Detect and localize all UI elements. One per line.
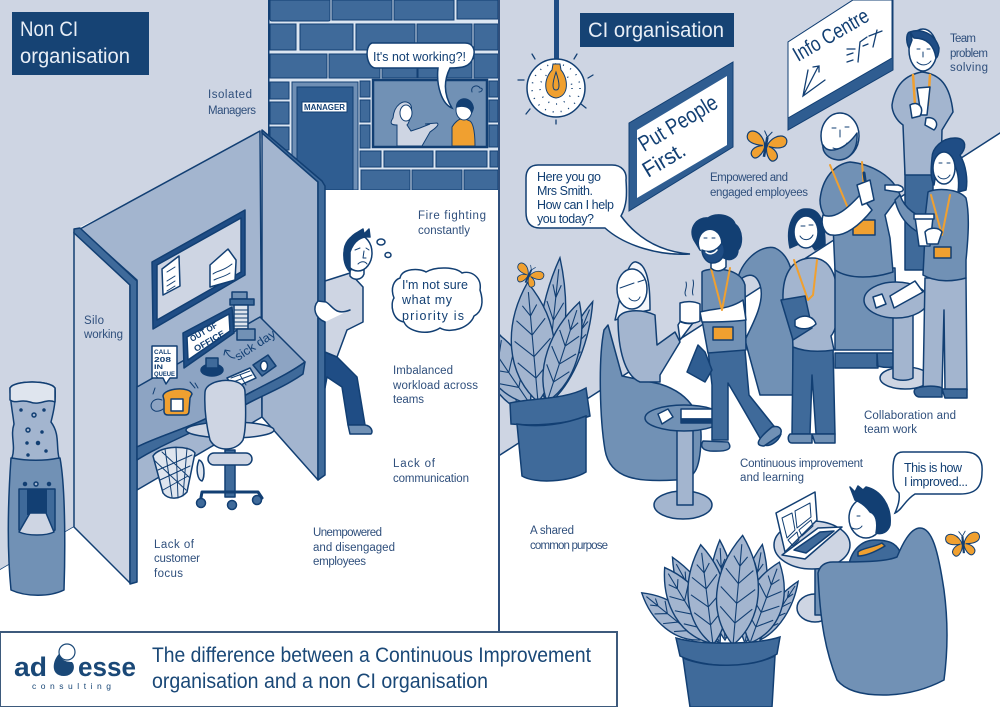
butterfly near chair — [945, 530, 981, 557]
orange telephone — [151, 382, 198, 415]
label: Unempowered and disengaged employees: and disengaged — [313, 542, 395, 554]
office chair — [186, 380, 274, 510]
label: Lack of communication: Lack of — [393, 458, 436, 470]
label: Lack of customer focus — [154, 539, 200, 580]
main title: organisation and a non CI organisation — [152, 670, 488, 693]
label: Collaboration and team work: team work — [864, 424, 917, 436]
plant: foreground — [634, 534, 805, 707]
label: Collaboration and team work — [864, 410, 956, 436]
label: Lack of communication — [393, 458, 469, 485]
cubicle left side panel — [74, 232, 130, 583]
butterfly on plant — [517, 262, 544, 288]
butterfly on wall — [744, 128, 788, 163]
label: Imbalanced workload across teams: Imbalanced — [393, 365, 453, 377]
label: Unempowered and disengaged employees: Unempowered — [313, 527, 382, 539]
panel: CI organisation — [459, 0, 1000, 707]
floor area — [0, 190, 499, 632]
cubicle — [74, 130, 325, 584]
back wall — [0, 0, 268, 570]
label: Collaboration and team work: Collaboration and — [864, 410, 956, 422]
speech bubble: Here you go: Mrs Smith. — [537, 184, 593, 198]
floor edge line — [0, 527, 74, 570]
heading: Non CI organisation — [12, 12, 149, 75]
cubicle back wall — [80, 131, 262, 490]
label: Fire fighting constantly: constantly — [418, 225, 470, 237]
notice board — [152, 210, 245, 329]
label: Empowered and engaged employees: Empowered and — [710, 172, 788, 184]
speech bubble: Here you go: Here you go — [537, 170, 601, 184]
label: Imbalanced workload across teams: teams — [393, 394, 424, 406]
label: Team problem solving — [950, 33, 988, 74]
main title — [152, 644, 591, 693]
label: Unempowered and disengaged employees — [313, 527, 395, 568]
back wall — [500, 0, 1000, 455]
label: Lack of customer focus: Lack of — [154, 539, 195, 551]
keyboard and mouse — [227, 355, 276, 388]
plant: left with butterfly — [500, 256, 594, 482]
label: Lack of communication: communication — [393, 473, 469, 485]
label: Team problem solving: problem — [950, 48, 988, 60]
speech bubble: it's not working: It's not working?! — [373, 50, 466, 64]
centre divider — [498, 0, 500, 632]
coffee table with papers — [645, 405, 723, 519]
call queue sign: QUEUE — [154, 372, 175, 378]
call queue sign: CALL — [154, 349, 171, 356]
label: Continuous improvement and learning: Continuous improvement — [740, 458, 864, 470]
armchair foreground — [818, 528, 947, 695]
label: Silo working: Silo — [84, 315, 104, 327]
label: Team problem solving: Team — [950, 33, 976, 45]
top man with coffee — [892, 29, 953, 270]
woman with coffee and lanyard — [895, 138, 968, 398]
speech bubble: it's not working — [367, 43, 474, 108]
label: Lack of customer focus: customer — [154, 553, 200, 565]
label: A shared common purpose: A shared — [530, 525, 574, 537]
water cooler — [8, 382, 65, 595]
woman with clipboard — [781, 209, 838, 443]
standing table with papers — [864, 281, 930, 389]
floor edge line — [500, 133, 1000, 455]
footer: title and logo — [0, 632, 617, 707]
thought cloud: priority is — [402, 309, 464, 323]
label: Imbalanced workload across teams: workload across — [392, 380, 478, 392]
door: manager — [292, 82, 358, 190]
label: Isolated Managers — [208, 89, 256, 117]
label: Empowered and engaged employees: engaged employees — [710, 187, 808, 199]
speech bubble: This is how: This is how — [904, 461, 963, 475]
heading: Non CI organisation: organisation — [20, 45, 130, 68]
label: Continuous improvement and learning: and learning — [740, 472, 804, 484]
computer monitor: out of office: OFFICE — [192, 328, 227, 354]
computer monitor: out of office — [183, 307, 234, 376]
label: A shared common purpose: common purpose — [530, 540, 608, 552]
bald man with notepad — [820, 113, 905, 368]
label: A shared common purpose — [530, 525, 608, 552]
logo: ad esse consulting — [14, 644, 136, 691]
bearded man serving coffee — [680, 215, 781, 451]
label: Imbalanced workload across teams — [392, 365, 478, 406]
call queue sign: IN — [154, 364, 163, 371]
hanging light bulb — [518, 0, 593, 124]
seated woman in armchair — [600, 262, 701, 481]
speech bubble: Here you go: you today? — [537, 212, 594, 226]
brick wall with manager office — [268, 0, 500, 190]
computer monitor: out of office: OUT OF — [188, 320, 219, 344]
logo: ad esse consulting: ad — [14, 652, 47, 682]
cubicle left panel edge — [74, 228, 137, 584]
heading: CI organisation — [580, 13, 734, 47]
poster: Put People First — [629, 62, 733, 211]
thought cloud: what my — [401, 293, 453, 307]
heading: Non CI organisation: Non CI — [20, 18, 78, 41]
poster: Put People First: First. — [638, 137, 690, 182]
heading: CI organisation: CI organisation — [588, 19, 724, 42]
cubicle right side wall — [262, 131, 318, 480]
call queue sign — [152, 346, 177, 384]
desk — [137, 317, 305, 460]
logo: ad esse consulting: consulting — [32, 681, 111, 691]
label: Silo working — [83, 315, 123, 341]
label: Isolated Managers: Isolated — [208, 89, 252, 101]
label: Isolated Managers: Managers — [208, 105, 256, 117]
main title: The difference between a Continuous Improvement — [152, 644, 591, 667]
speech bubble: This is how: I improved... — [904, 475, 968, 489]
label: Unempowered and disengaged employees: employees — [313, 556, 366, 568]
man on video call at laptop — [774, 486, 902, 622]
thought dots — [377, 239, 391, 258]
label: Lack of customer focus: focus — [154, 568, 183, 580]
window with two people — [373, 80, 487, 147]
stack of books — [230, 292, 255, 340]
call queue sign: 208 — [154, 355, 171, 364]
waste paper bin — [153, 447, 204, 498]
cubicle right wall edge — [262, 130, 325, 480]
panel: non CI organisation — [0, 0, 500, 632]
label: Team problem solving: solving — [950, 62, 988, 74]
sick day note: sick day — [232, 327, 278, 364]
speech bubble: Here you go: How can I help — [537, 198, 614, 212]
label: Fire fighting constantly — [418, 210, 486, 237]
label: Empowered and engaged employees — [710, 172, 808, 199]
poster: Put People First: Put People — [634, 90, 722, 156]
label: Continuous improvement and learning — [740, 458, 864, 484]
label: Silo working: working — [83, 329, 123, 341]
stressed man behind cubicle — [315, 229, 372, 434]
poster: Info Centre — [788, 0, 893, 130]
speech bubble: This is how — [893, 452, 982, 513]
door sign: MANAGER — [304, 103, 345, 112]
speech bubble: Here you go — [526, 165, 690, 254]
logo: ad esse consulting: esse — [78, 652, 136, 682]
label: Fire fighting constantly: Fire fighting — [418, 210, 486, 222]
thought cloud — [392, 268, 482, 332]
thought cloud: I'm not sure — [402, 278, 468, 292]
background armchair — [737, 247, 793, 395]
